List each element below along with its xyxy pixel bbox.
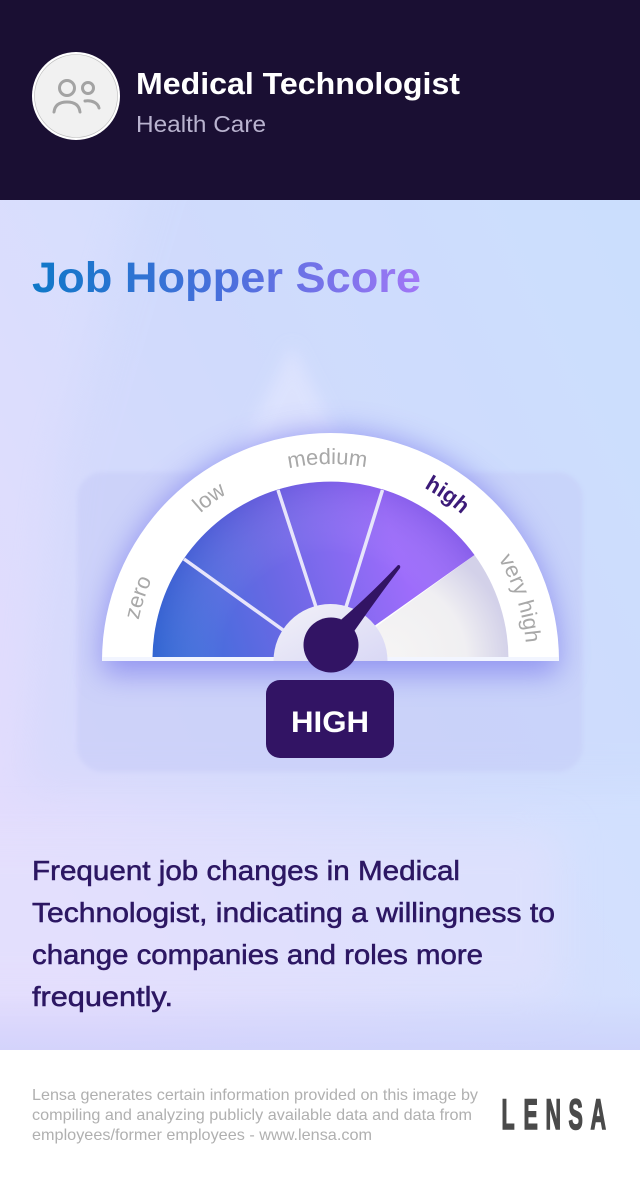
footer	[0, 1050, 640, 1178]
gauge base line	[102, 657, 559, 661]
icon: avatar with people	[32, 52, 120, 140]
disclaimer: compiling and analyzing publicly available data and data from	[32, 1107, 472, 1124]
gauge filled segments	[152, 482, 474, 657]
job title: Medical Technologist	[136, 66, 460, 101]
gauge remaining segment	[330, 555, 509, 660]
heading: Job Hopper Score	[32, 254, 421, 302]
needle	[304, 565, 400, 672]
description: Frequent job changes in Medical	[32, 855, 460, 886]
gauge	[102, 433, 559, 672]
gauge shadow	[102, 432, 559, 674]
disclaimer: Lensa generates certain information provided on this image by	[32, 1087, 478, 1104]
gauge card	[78, 415, 582, 769]
score badge	[266, 680, 394, 758]
description: Technologist, indicating a willingness to	[32, 897, 555, 928]
category: Health Care	[136, 111, 266, 137]
gauge hub	[274, 604, 388, 661]
label: medium: medium	[288, 448, 366, 468]
label: very high: very high	[500, 553, 541, 642]
label: low: low	[191, 484, 224, 512]
logo: LENSA	[502, 1091, 606, 1139]
header band	[0, 0, 640, 200]
description: change companies and roles more	[32, 939, 483, 970]
gauge white rim	[102, 433, 559, 661]
description	[32, 855, 555, 1012]
label: zero: zero	[128, 577, 150, 620]
background panel	[0, 150, 640, 1050]
description: frequently.	[32, 981, 173, 1012]
disclaimer	[32, 1087, 478, 1144]
label: high: high	[425, 474, 467, 514]
score badge: HIGH	[291, 706, 369, 739]
disclaimer: employees/former employees - www.lensa.com	[32, 1127, 372, 1144]
